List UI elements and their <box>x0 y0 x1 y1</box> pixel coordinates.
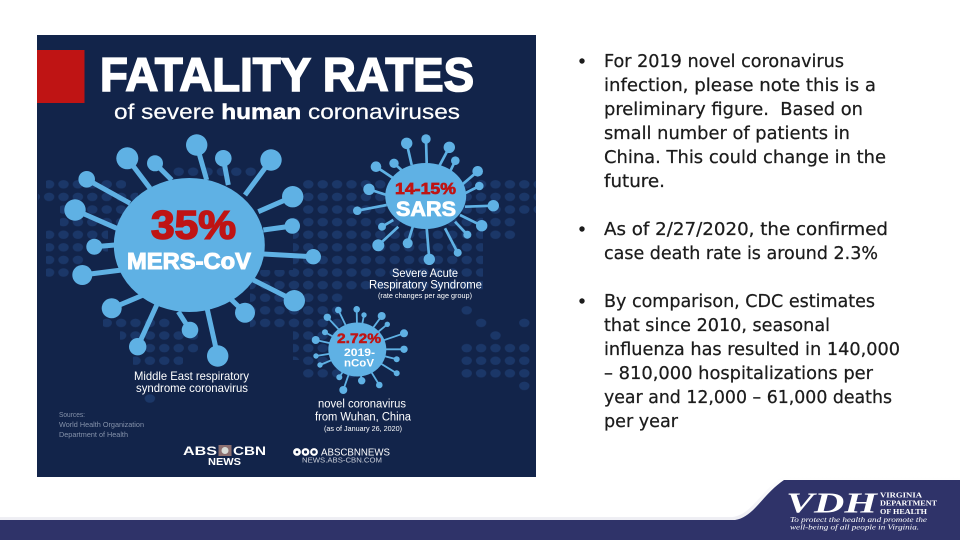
logo: ABS-CBN News <box>183 445 266 468</box>
bullet 2: case death rate is around 2.3% <box>604 244 878 264</box>
MERS description: Middle East respiratory <box>134 369 249 383</box>
sources: Department of Health <box>59 430 128 439</box>
nCoV rate: 2.72% <box>337 330 382 346</box>
sources: World Health Organization <box>59 420 144 429</box>
bullet 1: infection, please note this is a <box>604 76 876 96</box>
SARS description: Severe Acute <box>392 268 458 280</box>
SARS name: SARS <box>396 198 456 221</box>
bullet 3: – 810,000 hospitalizations per <box>604 364 874 384</box>
MERS description <box>134 369 249 395</box>
sources: Sources: <box>59 410 85 419</box>
bullet 1: For 2019 novel coronavirus <box>604 52 844 72</box>
MERS name: MERS-CoV <box>127 248 252 274</box>
bullet 1: preliminary figure. Based on <box>604 100 863 120</box>
title: FATALITY RATES <box>100 48 474 101</box>
SARS description <box>369 268 482 300</box>
nCoV name: nCoV <box>344 358 375 370</box>
sources <box>59 410 144 439</box>
social handles: ABSCBNNEWS <box>321 448 390 458</box>
nCoV description: (as of January 26, 2020) <box>324 424 402 433</box>
nCoV description: from Wuhan, China <box>315 412 412 424</box>
text block: bullet notes <box>579 52 900 432</box>
bullet 1: China. This could change in the <box>604 148 886 168</box>
virus: 2019-nCoV <box>312 306 408 394</box>
subtitle: of severe human coronaviruses <box>114 101 460 124</box>
SARS rate: 14-15% <box>395 181 456 198</box>
MERS rate: 35% <box>151 204 236 248</box>
world map of halftone dots <box>38 165 536 404</box>
logo: VDH: well-being of all people in Virginia. <box>790 524 919 532</box>
bullet 3: influenza has resulted in 140,000 <box>604 340 900 360</box>
bullet 3 <box>579 292 900 432</box>
logo: ABS-CBN News: NEWS <box>208 457 241 468</box>
logo: VDH: VIRGINIA <box>880 490 923 500</box>
nCoV name <box>344 347 375 370</box>
virus: MERS-CoV <box>64 134 321 367</box>
social handles: NEWS.ABS-CBN.COM <box>302 456 382 464</box>
MERS description: syndrome coronavirus <box>136 381 248 395</box>
bullet 3: that since 2010, seasonal <box>604 316 830 336</box>
logo: ABS-CBN News: ABS <box>183 446 217 458</box>
SARS description: (rate changes per age group) <box>378 291 472 300</box>
logo: ABS-CBN News: CBN <box>233 446 266 458</box>
nCoV description <box>315 399 412 433</box>
red accent square <box>37 50 84 103</box>
logo: VDH: To protect the health and promote the <box>790 516 927 524</box>
bullet 3: By comparison, CDC estimates <box>604 292 875 312</box>
bullet 1: future. <box>604 172 665 192</box>
logo: VDH: OF HEALTH <box>880 507 927 516</box>
bullet 3: per year <box>604 412 679 432</box>
nCoV description: novel coronavirus <box>318 399 406 411</box>
logo: VDH: VDH <box>786 488 879 520</box>
virus: SARS <box>353 134 499 265</box>
bullet 2: As of 2/27/2020, the confirmed <box>604 220 888 240</box>
panel: fatality rates infographic <box>37 35 536 477</box>
bullet 1: small number of patients in <box>604 124 850 144</box>
social handles <box>293 448 390 464</box>
nCoV name: 2019- <box>344 347 375 359</box>
bullet 3: year and 12,000 – 61,000 deaths <box>604 388 892 408</box>
SARS description: Respiratory Syndrome <box>369 280 482 292</box>
footer band <box>0 477 960 540</box>
logo: VDH <box>786 488 937 532</box>
bullet 2 <box>579 220 888 264</box>
bullet 1 <box>579 52 886 192</box>
logo: VDH: DEPARTMENT <box>880 498 937 508</box>
